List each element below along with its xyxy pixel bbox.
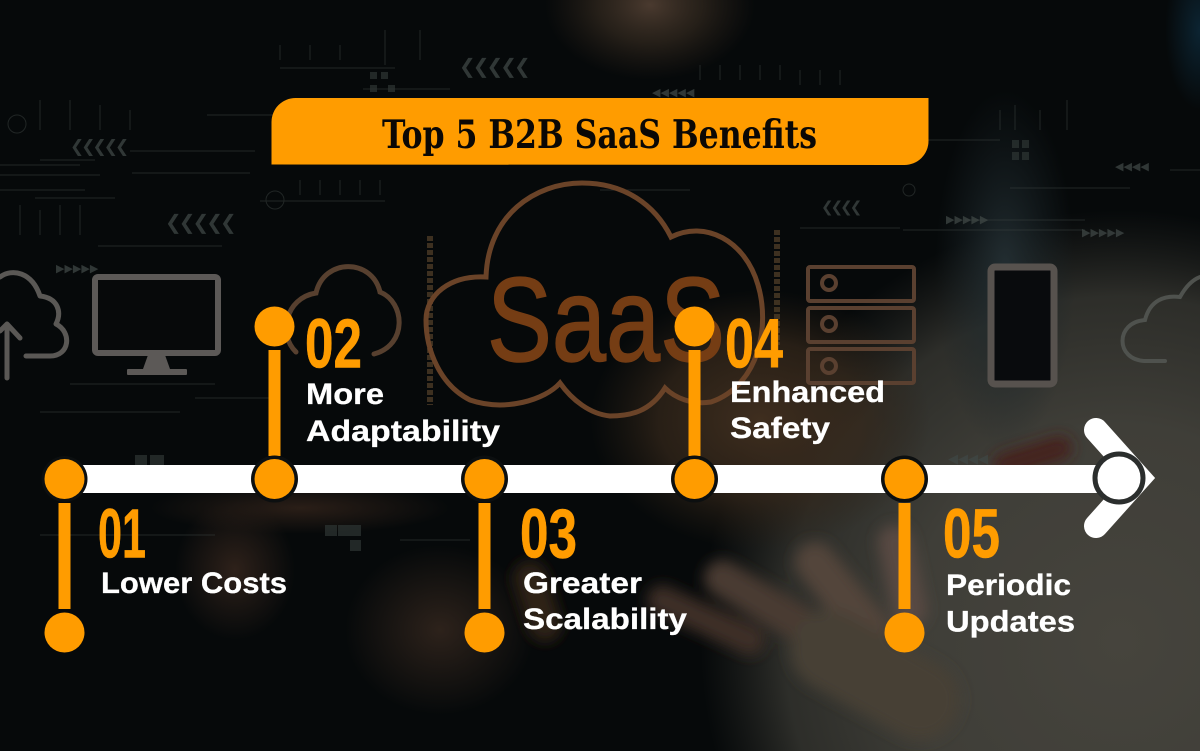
vertical dotted strip bbox=[430, 230, 777, 405]
step 04: 04 bbox=[725, 304, 783, 382]
step 04: Enhanced bbox=[730, 376, 885, 409]
chevron decorations: ◀◀◀◀◀ bbox=[652, 86, 695, 99]
step 01 bbox=[42, 456, 287, 652]
chevron decorations: ◀◀◀◀ bbox=[948, 452, 988, 467]
chevron decorations: ❮❮❮❮❮ bbox=[165, 210, 234, 234]
icon: server stack bbox=[808, 267, 914, 383]
step 02: Adaptability bbox=[306, 415, 500, 448]
icon: large SaaS cloud bbox=[426, 183, 763, 416]
SaaS word: SaaS bbox=[487, 253, 725, 387]
hand fingers bbox=[530, 448, 1060, 700]
icon: left cloud with upload arrow bbox=[0, 273, 67, 378]
step 05: 05 bbox=[943, 494, 1000, 572]
step 05: Periodic bbox=[946, 569, 1071, 602]
step 04: Safety bbox=[730, 412, 830, 445]
chevron decorations: ❮❮❮❮ bbox=[821, 198, 861, 216]
chevron decorations bbox=[56, 54, 1149, 467]
timeline bar with end arrow bbox=[64, 430, 1143, 526]
step 01: 01 bbox=[98, 494, 146, 572]
step 03: Greater bbox=[523, 567, 642, 600]
step 04 bbox=[671, 304, 885, 502]
step 05 bbox=[881, 456, 1075, 652]
small square decorations bbox=[135, 72, 1029, 551]
step 03: 03 bbox=[520, 494, 577, 572]
title banner bbox=[272, 98, 928, 165]
chevron decorations: ▶▶▶▶▶ bbox=[946, 213, 989, 226]
chevron decorations: ▶▶▶▶▶ bbox=[1082, 226, 1125, 239]
step 03 bbox=[461, 456, 687, 652]
step 02: 02 bbox=[305, 304, 362, 382]
chevron decorations: ❮❮❮❮❮ bbox=[70, 137, 127, 157]
icon: small brown cloud bbox=[286, 267, 399, 354]
chevron decorations: ❮❮❮❮❮ bbox=[459, 54, 528, 78]
icon: tablet bbox=[991, 267, 1054, 384]
title text: Top 5 B2B SaaS Benefits bbox=[382, 112, 817, 158]
icon: right cloud bbox=[1122, 277, 1200, 361]
chevron decorations: ◀◀◀◀ bbox=[1115, 160, 1149, 173]
chevron decorations: ▶▶▶▶▶ bbox=[56, 262, 99, 275]
faint tech pattern bbox=[0, 30, 1200, 540]
step 02 bbox=[251, 304, 500, 502]
step 01: Lower Costs bbox=[101, 567, 287, 600]
step 02: More bbox=[306, 378, 384, 411]
step 03: Scalability bbox=[523, 603, 687, 636]
step 05: Updates bbox=[946, 606, 1075, 638]
icon: monitor bbox=[95, 277, 218, 375]
